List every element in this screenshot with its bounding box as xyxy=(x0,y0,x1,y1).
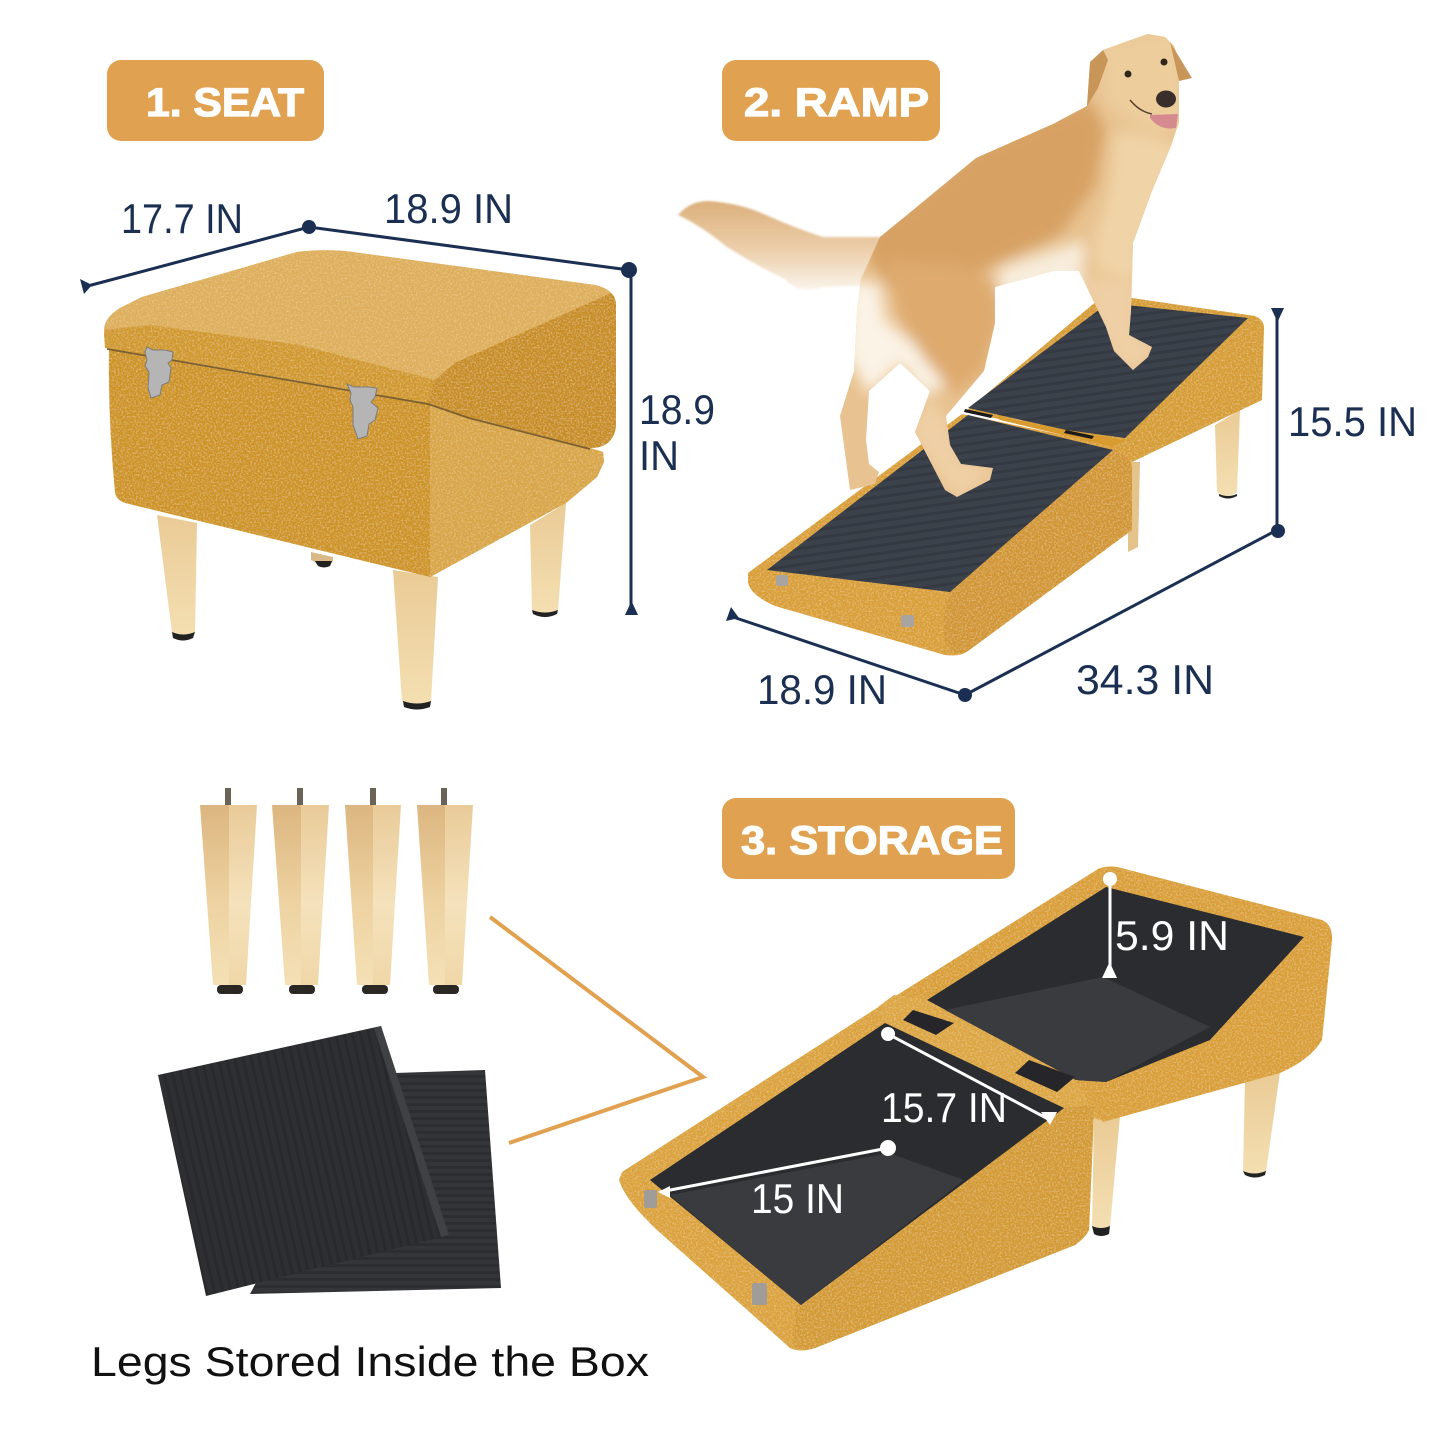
dog tail xyxy=(678,201,895,290)
seat dimension labels: 18.9 xyxy=(639,386,715,433)
seat dimension labels xyxy=(121,185,715,479)
ramp dimension labels: 18.9 IN xyxy=(757,666,887,713)
ramp legs xyxy=(1215,410,1240,496)
badge: 3. STORAGE: 3. STORAGE xyxy=(741,819,1003,863)
golden retriever dog xyxy=(678,20,1192,510)
seat body xyxy=(109,350,604,577)
dog belly xyxy=(995,240,1085,300)
seat legs xyxy=(157,503,566,710)
ramp dimension labels xyxy=(757,398,1417,713)
ramp illustration xyxy=(748,294,1264,656)
badge: 2. RAMP: 2. RAMP xyxy=(744,81,929,125)
storage legs xyxy=(1243,1072,1280,1175)
dog body xyxy=(840,34,1179,497)
seat dimension labels: 17.7 IN xyxy=(121,195,243,242)
dog haunch xyxy=(845,279,945,395)
ramp dimension labels: 34.3 IN xyxy=(1076,656,1214,703)
storage dimension labels: 5.9 IN xyxy=(1115,912,1229,959)
storage upper floor xyxy=(945,977,1210,1082)
storage dimension labels: 15 IN xyxy=(751,1175,844,1222)
ramp hinge strip xyxy=(995,416,1125,447)
dog face xyxy=(1124,42,1192,129)
white dimension lines xyxy=(658,872,1117,1198)
storage lower wedge xyxy=(619,1005,1094,1350)
caption: Legs Stored Inside the Box xyxy=(91,1338,649,1385)
storage lower floor xyxy=(670,1153,964,1305)
ramp dimension labels: 15.5 IN xyxy=(1288,398,1417,445)
seat dimension lines xyxy=(80,220,638,615)
seat lid xyxy=(104,250,616,448)
dog head xyxy=(1102,34,1179,130)
dog saddle xyxy=(860,100,1105,300)
dog left ear xyxy=(1086,50,1108,108)
spare wooden legs xyxy=(200,788,473,994)
seat dimension labels: 18.9 IN xyxy=(384,185,513,232)
dog chest xyxy=(1095,130,1185,280)
badge: 2. RAMP xyxy=(722,60,940,141)
badge: 1. SEAT: 1. SEAT xyxy=(146,81,304,125)
storage hinges xyxy=(903,1010,1075,1092)
dog thigh xyxy=(885,260,1000,395)
open storage illustration xyxy=(619,866,1332,1350)
storage upper wedge xyxy=(894,866,1332,1122)
seat lid seam xyxy=(107,349,590,449)
carpet pads xyxy=(158,1026,501,1296)
storage dimension labels xyxy=(751,912,1229,1222)
badge: 1. SEAT xyxy=(107,60,324,141)
storage lower interior xyxy=(650,1023,1064,1305)
storage upper interior xyxy=(927,887,1304,1082)
ramp upper carpet xyxy=(968,303,1248,438)
seat dimension labels: IN xyxy=(639,432,679,479)
seat fabric xyxy=(104,250,616,577)
badge: 3. STORAGE xyxy=(722,798,1015,879)
ramp lower carpet xyxy=(767,415,1113,592)
dog legs detail xyxy=(910,280,1155,500)
storage hardware xyxy=(644,1190,767,1305)
storage hinge strip xyxy=(878,995,1100,1120)
ramp dimension lines xyxy=(726,308,1285,702)
seat ottoman illustration xyxy=(104,250,616,709)
connector lines to storage xyxy=(490,917,703,1143)
ramp lower wedge xyxy=(748,414,1132,656)
storage dimension labels: 15.7 IN xyxy=(881,1084,1007,1131)
seat latches xyxy=(145,347,378,439)
ramp hardware xyxy=(776,575,914,627)
ramp upper wedge xyxy=(965,294,1264,463)
